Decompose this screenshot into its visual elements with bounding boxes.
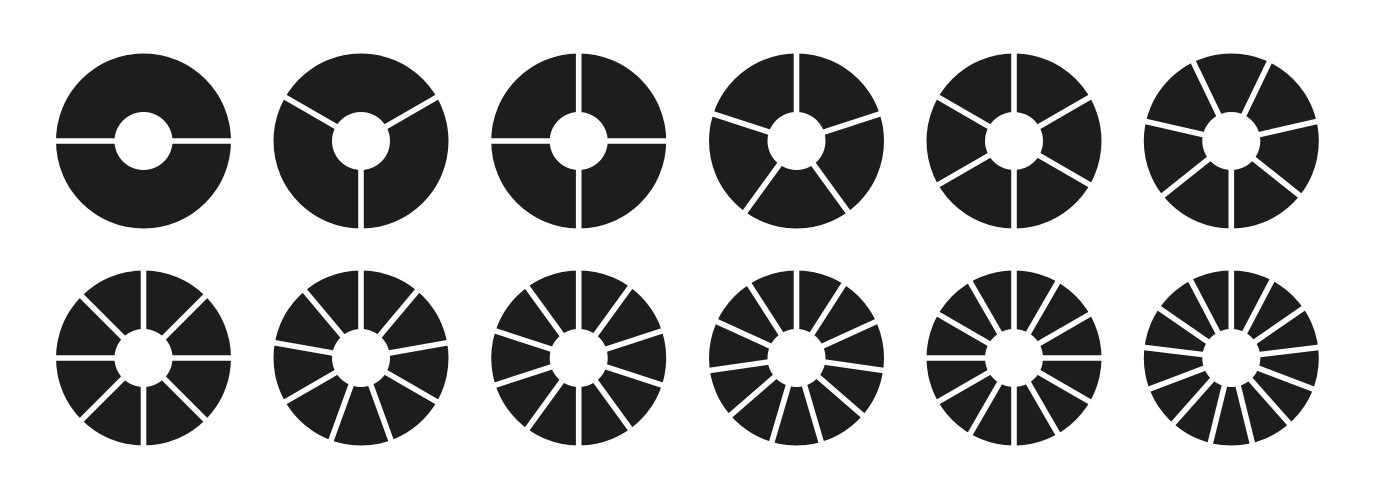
wheel: 9 segments	[267, 263, 455, 447]
wheel: 2 segments	[48, 54, 238, 228]
wheel: 6 segments	[926, 46, 1102, 236]
wheel: 12 segments	[919, 263, 1109, 453]
wheel: 7 segments	[1139, 54, 1324, 236]
wheel: 8 segments	[48, 263, 238, 453]
wheel: 4 segments	[484, 46, 674, 236]
wheel: 11 segments	[702, 263, 891, 449]
wheel: 10 segments	[488, 263, 669, 453]
wheel: 5 segments	[706, 46, 887, 228]
wheel: 3 segments	[274, 54, 448, 236]
wheel: 13 segments	[1137, 263, 1326, 450]
